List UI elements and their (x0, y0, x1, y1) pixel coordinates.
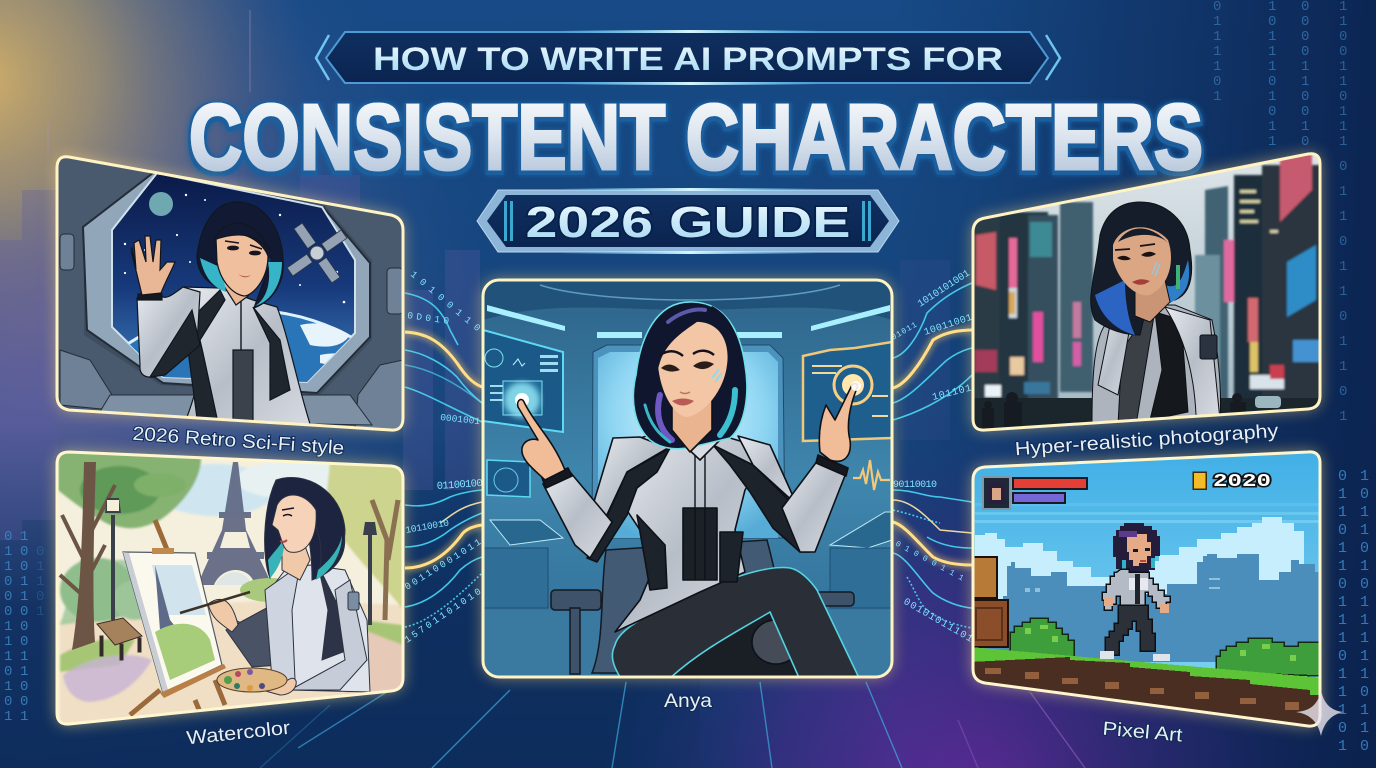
binary digit columns: 1 (1338, 702, 1347, 719)
icon: sparkle watermark (1296, 690, 1344, 736)
hair front (658, 306, 733, 369)
binary digit columns: 1 (4, 634, 12, 650)
gold touch glow (851, 381, 861, 391)
binary digit columns: 0 (1339, 234, 1347, 250)
data labels left: 10110010 (405, 517, 450, 536)
panel: central Anya (480, 278, 895, 680)
binary digit columns: 0 (4, 694, 12, 710)
binary digit columns: 1 (36, 559, 44, 575)
binary digit columns: 0 (1301, 89, 1309, 105)
binary digit columns: 0 (1301, 29, 1309, 45)
binary digit columns: 0 (20, 694, 28, 710)
binary digit columns: 0 (20, 559, 28, 575)
binary digit columns: 0 (1301, 104, 1309, 120)
easel and canvas (130, 520, 225, 715)
binary digit columns: 0 (1301, 134, 1309, 150)
binary digit columns: 0 (20, 634, 28, 650)
binary digit columns: 0 (1360, 684, 1369, 701)
binary digit columns: 1 (1339, 334, 1347, 350)
binary digit columns: 0 (4, 589, 12, 605)
binary digit columns: 0 (1338, 468, 1347, 485)
binary digit columns: 1 (1339, 284, 1347, 300)
perspective floor lines (260, 682, 1085, 768)
guide badge: 2026 guide: 2026 GUIDE (526, 198, 850, 247)
title banner: how to write AI prompts for (235, 30, 1145, 85)
binary digit columns: 1 (1339, 409, 1347, 425)
binary digit columns: 1 (1268, 89, 1276, 105)
binary digit columns: 1 (1360, 630, 1369, 647)
binary digit columns: 1 (1360, 612, 1369, 629)
binary digit columns: 1 (20, 529, 28, 545)
binary digit columns: 0 (4, 604, 12, 620)
binary digit columns: 1 (4, 619, 12, 635)
binary digit columns: 1 (1360, 594, 1369, 611)
binary digit columns: 1 (1213, 14, 1221, 30)
panel: watercolor (50, 450, 410, 730)
binary digit columns: 1 (1268, 29, 1276, 45)
character: waving Anya (131, 202, 312, 430)
face (658, 322, 728, 417)
watercolor scenery (58, 452, 403, 730)
ground and dirt (974, 657, 1318, 725)
legs (612, 567, 860, 680)
binary digit columns: 1 (36, 604, 44, 620)
binary digit columns: 1 (1339, 259, 1347, 275)
binary digit columns: 0 (36, 589, 44, 605)
binary digit columns: 1 (1339, 59, 1347, 75)
data labels right: 00101011101 (901, 597, 974, 645)
binary digit columns: 0 (1360, 540, 1369, 557)
caption: 2026 retro sci-fi style: 2026 Retro Sci-Fi style (132, 424, 345, 459)
binary digit columns: 1 (1339, 359, 1347, 375)
office chair (551, 540, 854, 674)
binary digit columns: 1 (1268, 44, 1276, 60)
binary digit columns: 1 (1360, 468, 1369, 485)
binary digit columns: 0 (20, 679, 28, 695)
gold energy curve lower right (893, 522, 972, 565)
binary digit columns: 0 (1301, 14, 1309, 30)
binary digit columns: 1 (4, 679, 12, 695)
binary digit columns: 1 (1338, 684, 1347, 701)
data labels right: 10011001 (923, 313, 974, 339)
data labels left: 01100100 (436, 478, 483, 493)
guide badge: 2026 guide (477, 188, 899, 254)
character: painter Anya (180, 477, 370, 695)
binary digit columns: 1 (1360, 720, 1369, 737)
hands (518, 384, 858, 480)
binary digit columns: 1 (1268, 119, 1276, 135)
jacket (542, 420, 848, 632)
binary digit columns: 1 (1338, 630, 1347, 647)
gold energy curve lower left (405, 525, 482, 568)
title banner: how to write AI prompts for: HOW TO WRITE AI PROMPTS FOR (373, 41, 1003, 77)
hair back and neck (633, 302, 747, 449)
binary digit columns: 1 (1338, 594, 1347, 611)
character: Anya pointing (518, 302, 860, 680)
pixel city (975, 554, 1341, 662)
binary digit columns: 1 (4, 544, 12, 560)
city buildings right (1195, 152, 1322, 415)
binary digit columns: 1 (1338, 540, 1347, 557)
caption: Anya: Anya (664, 691, 712, 712)
binary digit columns: 1 (1213, 89, 1221, 105)
panel: retro sci-fi (47, 150, 414, 440)
binary digit columns: 0 (1268, 74, 1276, 90)
facial features (660, 351, 722, 406)
gold energy curve upper right (893, 330, 972, 388)
data flow lines right (893, 283, 972, 628)
binary digit columns: 1 (1339, 104, 1347, 120)
binary digit columns: 1 (20, 649, 28, 665)
binary digit columns: 0 (1339, 89, 1347, 105)
room interior (480, 278, 895, 680)
data labels right (890, 268, 974, 645)
crates (970, 557, 997, 598)
character: pixel Anya (1100, 523, 1170, 661)
binary digit columns: 1 (1301, 74, 1309, 90)
faint city skyline (0, 165, 950, 540)
trees and lamps (72, 462, 96, 650)
binary digit columns: 1 (36, 574, 44, 590)
binary digit columns: 0 (36, 544, 44, 560)
binary digit columns: 0 (1268, 14, 1276, 30)
binary digit columns: 0 (1301, 44, 1309, 60)
character: realistic Anya (1091, 202, 1221, 425)
binary digit columns: 0 (4, 574, 12, 590)
binary digit columns: 1 (1268, 59, 1276, 75)
panel: pixel art (970, 450, 1341, 735)
data labels left: 0D010 (407, 310, 450, 327)
caption: pixel art: Pixel Art (1102, 719, 1184, 747)
binary digit columns: 1 (4, 649, 12, 665)
binary digit columns: 1 (1339, 134, 1347, 150)
binary digit columns: 1 (1338, 558, 1347, 575)
binary digit columns: 1 (1339, 184, 1347, 200)
binary digit columns: 1 (1213, 59, 1221, 75)
touch glow points (504, 382, 540, 418)
binary digit columns: 0 (4, 664, 12, 680)
binary digit columns: 0 (1338, 522, 1347, 539)
binary digit columns: 0 (1339, 159, 1347, 175)
binary digit columns: 1 (1339, 119, 1347, 135)
binary digit columns: 0 (1360, 486, 1369, 503)
data labels left: 00110001011 (403, 536, 483, 593)
binary digit columns: 1 (1360, 522, 1369, 539)
binary digit columns: 1 (4, 709, 12, 725)
binary digit columns: 1 (20, 709, 28, 725)
binary digit columns: 1 (1213, 29, 1221, 45)
data labels right: 01011 (890, 321, 919, 343)
data labels right: 1010101001 (916, 268, 972, 310)
binary digit columns: 1 (1338, 738, 1347, 755)
binary digit columns: 1 (1339, 14, 1347, 30)
binary digit columns: 0 (1213, 74, 1221, 90)
binary digit columns: 1 (1338, 612, 1347, 629)
binary digit columns: 0 (1338, 648, 1347, 665)
data labels right: 101101 (931, 384, 973, 404)
binary digit columns: 1 (1360, 558, 1369, 575)
binary digit columns: 1 (1339, 209, 1347, 225)
binary digit columns: 1 (1213, 44, 1221, 60)
gold energy curve upper left (405, 332, 482, 387)
pixel clouds (975, 517, 1304, 601)
binary digit columns: 1 (20, 574, 28, 590)
score counter: 2020 (1213, 472, 1271, 492)
data labels left: 15701101010 (403, 586, 484, 645)
binary digit columns: 0 (1339, 29, 1347, 45)
caption: hyper-realistic photography: Hyper-realistic photography (1014, 421, 1280, 460)
data labels left: 0001001 (440, 412, 481, 427)
binary digit columns: 1 (1301, 119, 1309, 135)
binary digit columns: 1 (20, 589, 28, 605)
data labels left (403, 269, 484, 645)
icon: satellite (286, 222, 348, 284)
game HUD (983, 472, 1206, 509)
data labels left: 10100110 (408, 269, 483, 334)
data labels right: 01000111 (894, 540, 965, 583)
data flow lines left (405, 293, 482, 627)
binary digit columns: 1 (1360, 702, 1369, 719)
binary digit columns: 1 (1360, 648, 1369, 665)
binary digit columns: 0 (20, 604, 28, 620)
binary digit columns: 1 (1360, 666, 1369, 683)
binary digit columns: 0 (1360, 576, 1369, 593)
caption: watercolor: Watercolor (186, 718, 292, 749)
bushes (1010, 618, 1074, 658)
binary digit columns: 1 (1268, 134, 1276, 150)
binary digit columns: 1 (1338, 666, 1347, 683)
binary digit columns: 0 (1339, 44, 1347, 60)
eiffel tower (198, 462, 272, 585)
binary digit columns: 1 (1338, 504, 1347, 521)
binary digit columns: 0 (1338, 576, 1347, 593)
panel: hyper-realistic photography (970, 150, 1325, 435)
icon: moon (149, 192, 173, 216)
binary digit columns: 1 (1360, 504, 1369, 521)
binary digit columns: 0 (1338, 720, 1347, 737)
binary digit columns: 0 (1268, 104, 1276, 120)
bench (97, 618, 142, 660)
binary digit columns: 0 (1339, 309, 1347, 325)
binary digit columns: 1 (1339, 74, 1347, 90)
data labels right: 90110010 (893, 480, 937, 491)
binary digit columns: 0 (20, 619, 28, 635)
binary digit columns: 0 (1339, 384, 1347, 400)
binary digit columns: 1 (1338, 486, 1347, 503)
binary digit columns: 0 (4, 529, 12, 545)
binary digit columns: 0 (20, 544, 28, 560)
binary digit columns: 1 (20, 664, 28, 680)
city buildings left (974, 200, 1094, 398)
binary digit columns: 1 (1301, 59, 1309, 75)
binary digit columns: 0 (1360, 738, 1369, 755)
binary digit columns: 1 (4, 559, 12, 575)
